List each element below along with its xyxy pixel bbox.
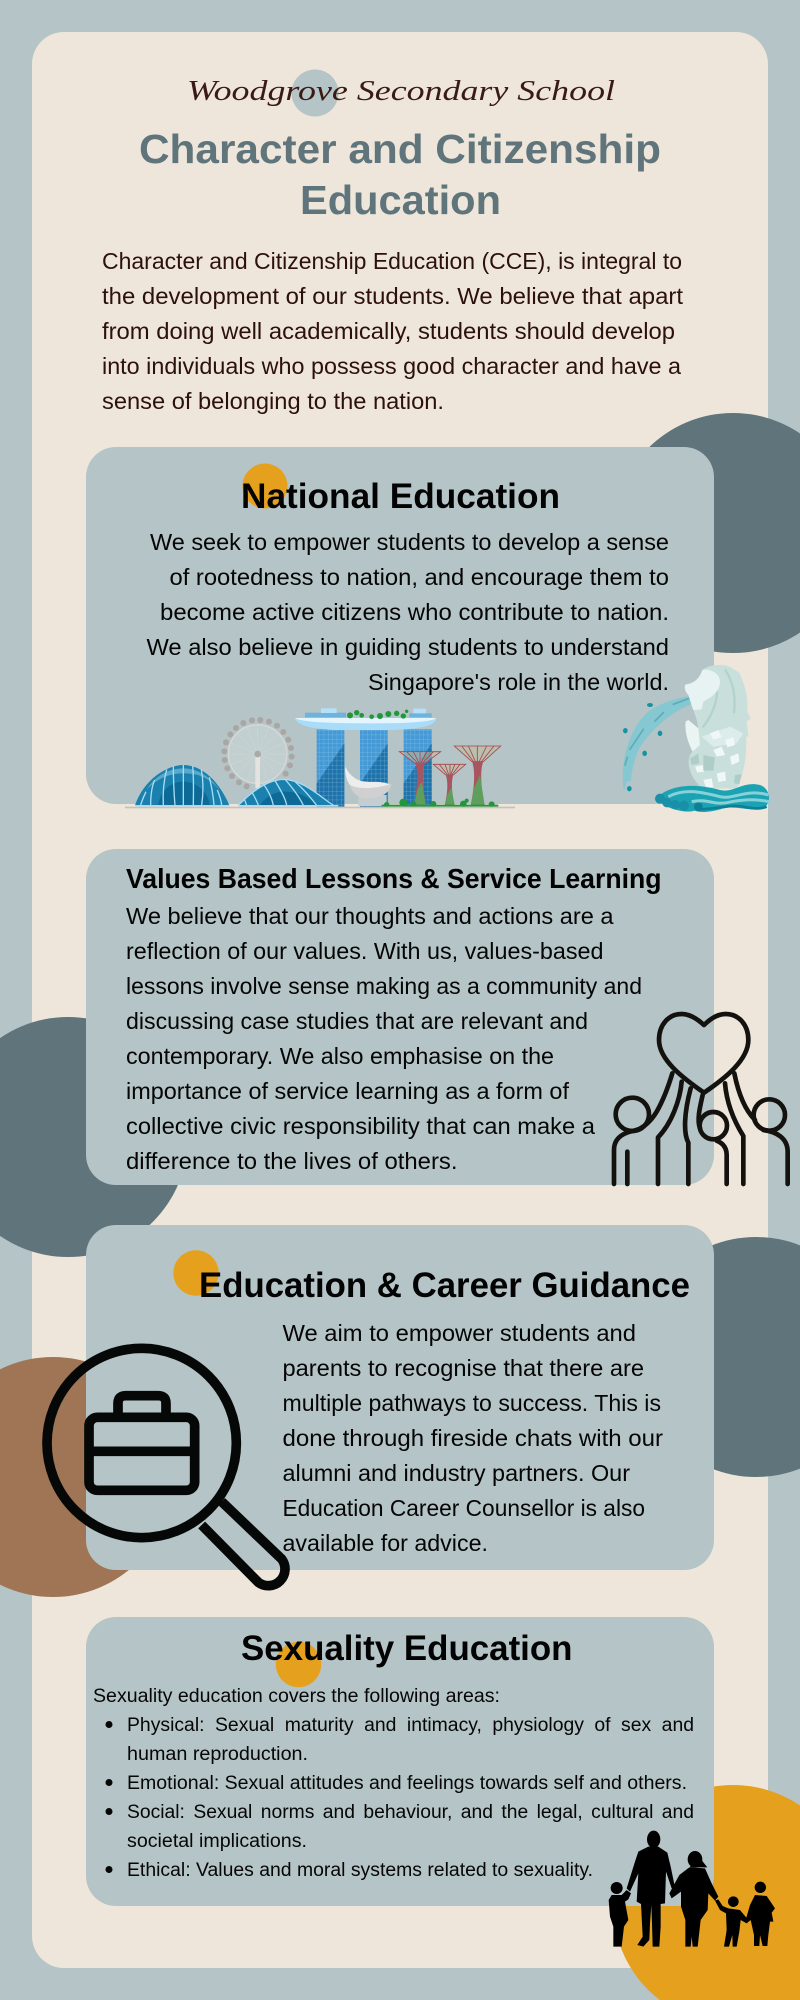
body text: Singapore's role in the world. [368, 669, 669, 695]
left child [609, 1882, 631, 1947]
panel: Values Based Lessons & Service Learning [86, 849, 714, 1185]
illustration: Singapore skyline [125, 708, 515, 808]
ArtScience Museum [345, 767, 392, 806]
decorative circle: brown [0, 1357, 173, 1597]
page header [102, 70, 684, 414]
icon: people holding a heart [614, 1014, 788, 1184]
body text: We aim to empower students and [282, 1320, 636, 1346]
accent dot [173, 1250, 219, 1296]
heading: Values Based Lessons & Service Learning [126, 863, 662, 894]
body text: collective civic responsibility that can make a [126, 1113, 595, 1139]
intro paragraph: the development of our students. We believe that apart [102, 283, 684, 309]
decorative circle: orange bottom right [613, 1785, 800, 2000]
ground line [125, 807, 515, 808]
body text: We also believe in guiding students to understand [146, 634, 669, 660]
body text: We seek to empower students to develop a sense [150, 529, 669, 555]
lead-in sentence: Sexuality education covers the following areas: [93, 1686, 500, 1707]
heading: Sexuality Education [241, 1629, 572, 1668]
decorative circle: middle left [0, 1017, 188, 1257]
bullet list: societal implications. [127, 1831, 307, 1852]
decorative circle: top right [613, 413, 800, 653]
body text: become active citizens who contribute to nation. [160, 599, 669, 625]
accent dot behind school name [292, 70, 338, 116]
title: Education [300, 177, 501, 223]
bullet list: Social: Sexual norms and behaviour, and the legal, cultural and [127, 1802, 694, 1823]
body text: contemporary. We also emphasise on the [126, 1043, 554, 1069]
bullet list: human reproduction. [127, 1744, 308, 1765]
intro paragraph: from doing well academically, students should develop [102, 318, 675, 344]
accent dot [242, 464, 288, 508]
title [139, 126, 661, 223]
intro paragraph [102, 248, 684, 414]
icon: magnifier with briefcase [47, 1348, 285, 1586]
body text: of rootedness to nation, and encourage them to [170, 564, 669, 590]
body text: parents to recognise that there are [282, 1355, 644, 1381]
body text: multiple pathways to success. This is [282, 1390, 661, 1416]
Marina Bay Sands [295, 708, 436, 807]
body text: available for advice. [282, 1530, 488, 1556]
mother [669, 1851, 718, 1947]
bullet list: Ethical: Values and moral systems related to sexuality. [127, 1860, 593, 1881]
panel: Education & Career Guidance [86, 1225, 714, 1570]
accent dot [276, 1642, 321, 1687]
bullet list [106, 1715, 694, 1881]
body text: Education Career Counsellor is also [282, 1495, 645, 1521]
small girl [715, 1896, 748, 1947]
body text: reflection of our values. With us, values-based [126, 938, 604, 964]
body text [146, 529, 669, 695]
body text: importance of service learning as a form of [126, 1078, 570, 1104]
icon: family silhouette [609, 1831, 775, 1947]
school name: Woodgrove Secondary School [187, 75, 615, 107]
intro paragraph: into individuals who possess good character and have a [102, 353, 681, 379]
dome: flower dome [135, 765, 229, 806]
ferris wheel [221, 717, 295, 789]
heading: National Education [241, 477, 560, 516]
panel: Sexuality Education [86, 1617, 714, 1906]
body text: We believe that our thoughts and actions are a [126, 903, 614, 929]
body text [282, 1320, 663, 1556]
illustration: Merlion [623, 665, 769, 812]
body text: difference to the lives of others. [126, 1148, 458, 1174]
intro paragraph: sense of belonging to the nation. [102, 388, 444, 414]
father [627, 1831, 675, 1947]
dome: cloud forest [238, 779, 338, 806]
water jet [623, 696, 696, 792]
intro paragraph: Character and Citizenship Education (CCE), is integral to [102, 248, 682, 274]
body text: lessons involve sense making as a community and [126, 973, 642, 999]
statue [685, 665, 751, 788]
panel: National Education [86, 447, 714, 804]
title: Character and Citizenship [139, 126, 661, 172]
bullet list: Physical: Sexual maturity and intimacy, physiology of sex and [127, 1715, 694, 1736]
waves [655, 784, 769, 812]
bullet list: Emotional: Sexual attitudes and feelings towards self and others. [127, 1773, 687, 1794]
body text: alumni and industry partners. Our [282, 1460, 630, 1486]
decorative circle: right of career panel [636, 1237, 800, 1477]
Supertrees [382, 746, 501, 807]
body text [126, 903, 642, 1174]
heading: Education & Career Guidance [199, 1265, 690, 1305]
boy [746, 1882, 775, 1946]
body text: discussing case studies that are relevant and [126, 1008, 588, 1034]
body text: done through fireside chats with our [282, 1425, 663, 1451]
